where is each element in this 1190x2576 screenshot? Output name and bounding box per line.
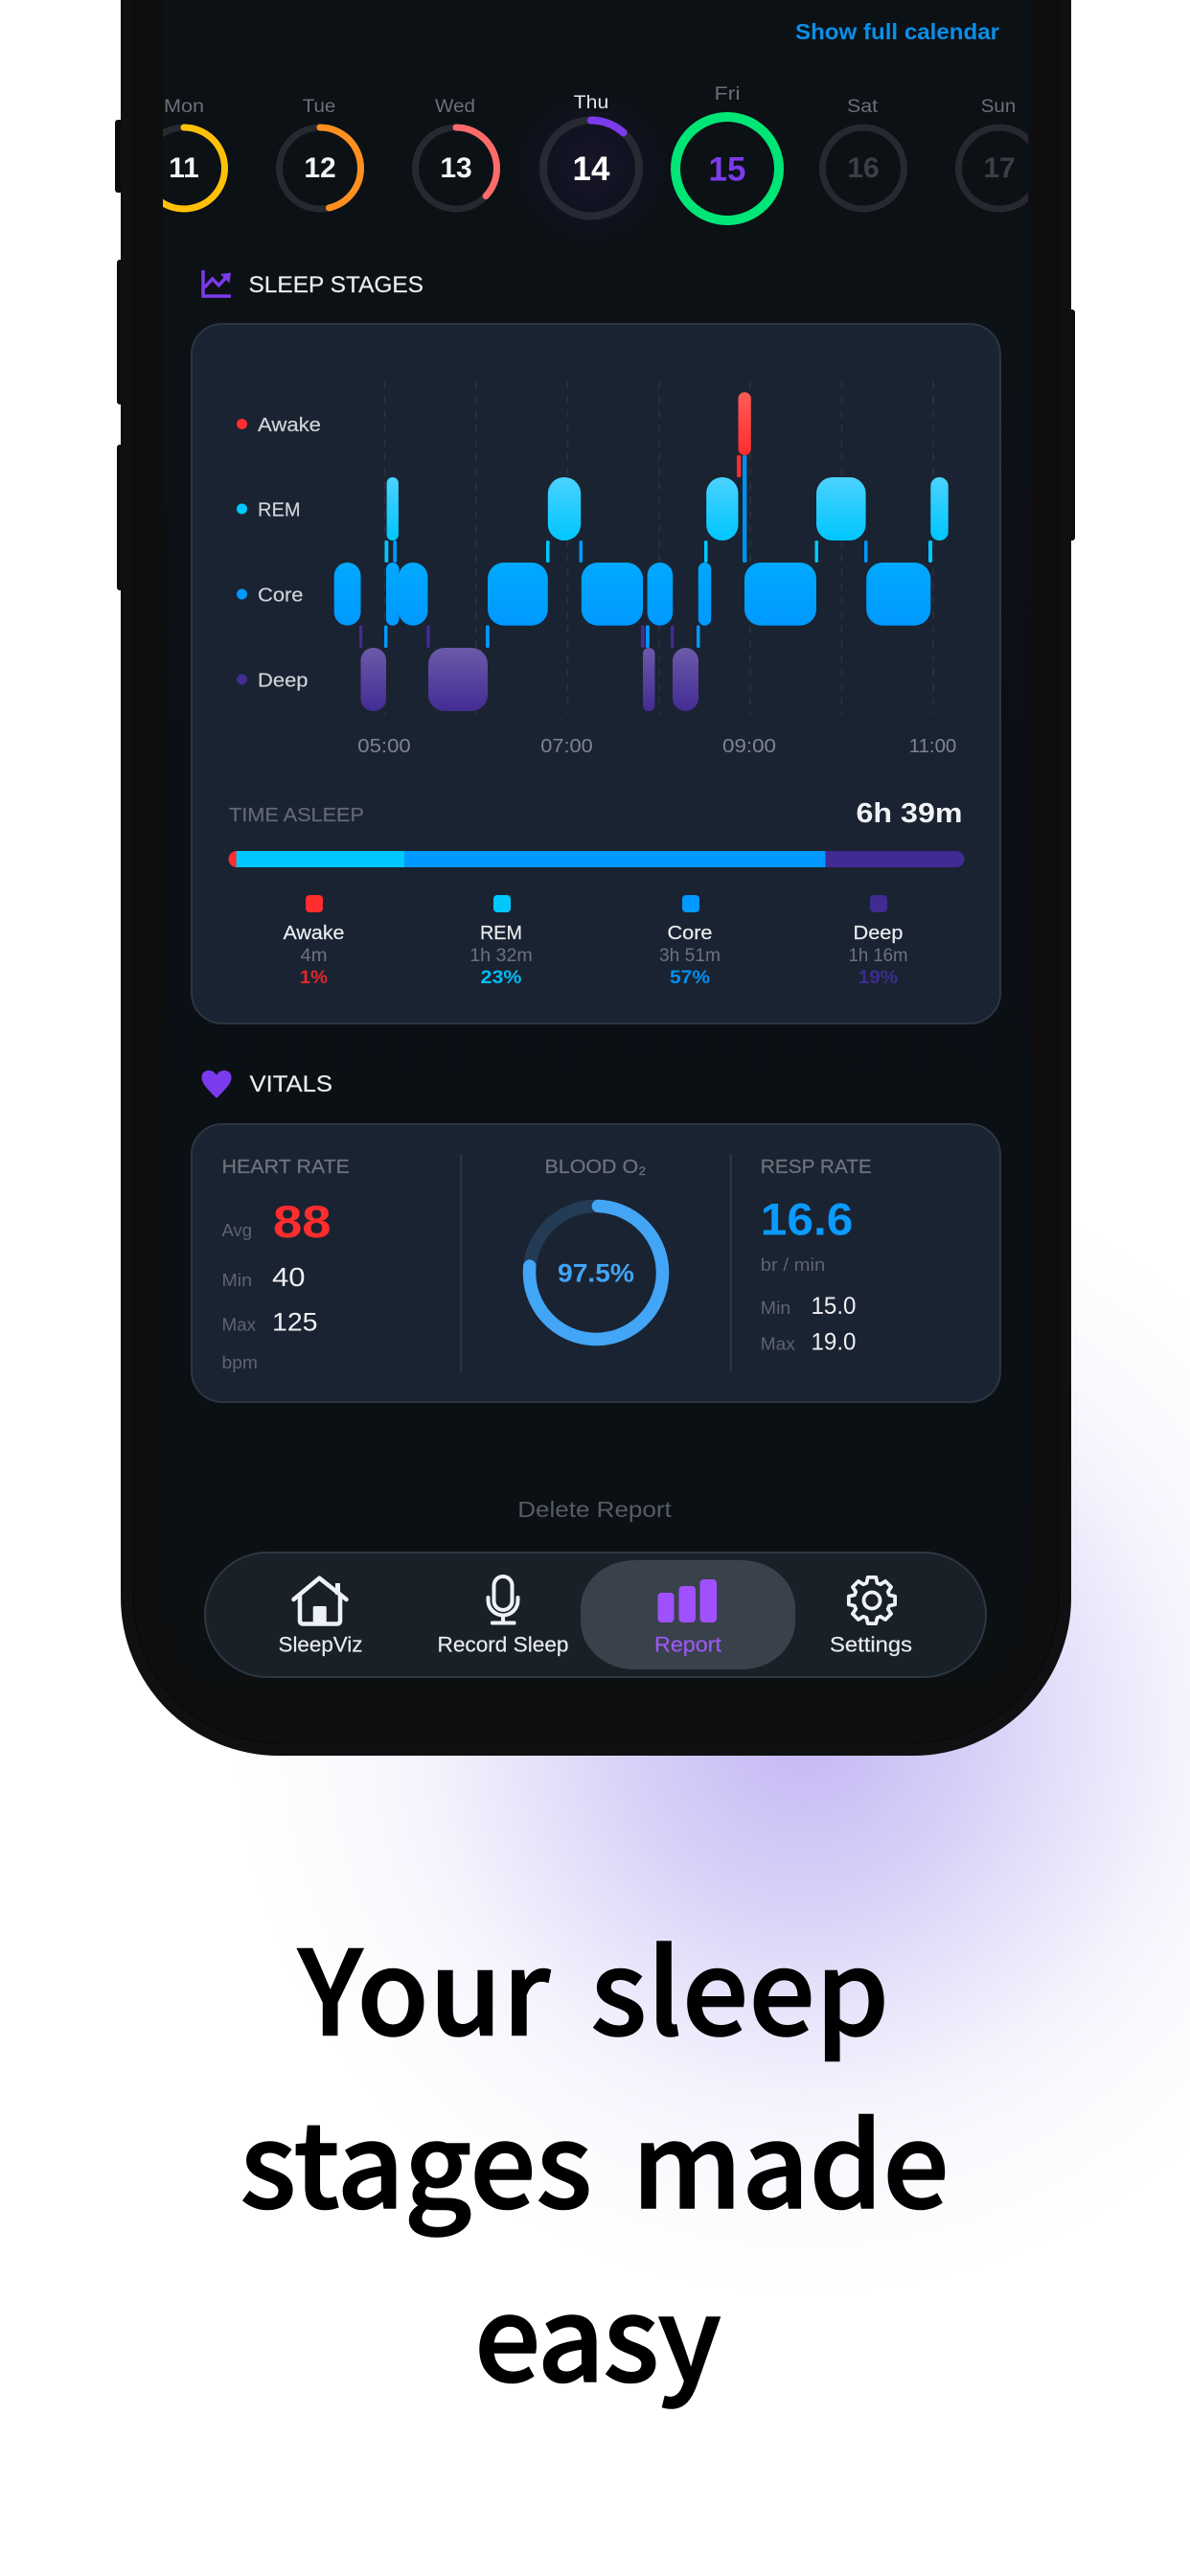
tab: Record Sleep — [437, 1576, 569, 1656]
day: Thu 14 — [543, 93, 639, 217]
donut gauge — [527, 1204, 665, 1342]
grid lines — [385, 381, 933, 714]
panel: sleep stages — [192, 324, 1000, 1024]
respiratory rate column: 19.0 — [811, 1328, 857, 1355]
day: Sun 17: Sun — [981, 97, 1016, 117]
legend: core — [659, 895, 721, 988]
day: Tue 12 — [280, 97, 360, 209]
legend: deep — [849, 895, 908, 988]
day: Thu 14: Thu — [574, 93, 608, 113]
stage labels: Awake — [258, 414, 321, 436]
heading: vitals: VITALS — [249, 1071, 332, 1097]
day: Wed 13: Wed — [435, 97, 475, 117]
time axis: 11:00 — [909, 735, 956, 757]
tab: SleepViz: SleepViz — [278, 1633, 362, 1656]
headline: Your sleep — [297, 1899, 889, 2070]
time axis: 05:00 — [357, 735, 411, 757]
respiratory rate column — [761, 1157, 872, 1355]
stage labels — [237, 414, 321, 692]
time axis: 07:00 — [540, 735, 593, 757]
day: Mon 11: Mon — [164, 97, 204, 117]
day: Thu 14: 14 — [573, 150, 610, 188]
heart rate column: Min — [222, 1270, 252, 1290]
day: Sat 16: Sat — [847, 97, 879, 117]
hypnogram connectors — [359, 455, 932, 648]
day: Sat 16: 16 — [847, 152, 880, 184]
phone mockup — [115, 0, 1075, 1756]
day: Fri 15: 15 — [709, 151, 745, 188]
legend: awake — [284, 895, 345, 988]
link: delete report: Delete Report — [517, 1497, 672, 1522]
hypnogram: deep blocks — [360, 648, 698, 711]
day: Wed 13: 13 — [440, 152, 472, 184]
legend: rem — [469, 895, 533, 988]
legend: rem: REM — [480, 922, 522, 944]
tab: Report (active): Report — [654, 1633, 721, 1656]
label: time asleep: TIME ASLEEP — [229, 805, 364, 826]
respiratory rate column: RESP RATE — [761, 1157, 872, 1178]
day: Tue 12: Tue — [303, 97, 335, 117]
respiratory rate column: 16.6 — [761, 1194, 853, 1244]
tab bar — [205, 1552, 986, 1677]
day: Fri 15: Fri — [715, 84, 740, 104]
stage labels: REM — [258, 498, 301, 521]
heart rate column: Avg — [222, 1220, 252, 1240]
tab: Settings — [830, 1577, 912, 1656]
icon: sleep stages chart — [203, 270, 231, 296]
panel: vitals — [192, 1124, 1000, 1402]
legend: deep: Deep — [853, 922, 903, 944]
day: Mon 11: 11 — [169, 152, 199, 184]
heart rate column: 125 — [272, 1307, 318, 1336]
highlight glow behind Thursday — [538, 114, 646, 222]
tab: Record Sleep: Record Sleep — [437, 1633, 569, 1656]
headline — [240, 1899, 949, 2416]
screen — [163, 0, 1030, 1718]
day: Sun 17 — [958, 97, 1041, 209]
heart rate column: Max — [222, 1315, 257, 1334]
heart rate column: 88 — [273, 1196, 332, 1247]
legend: rem: 1h 32m — [469, 946, 533, 966]
day: Mon 11 — [163, 100, 228, 213]
tab: Report (active) — [654, 1579, 721, 1656]
day: Sun 17: 17 — [983, 152, 1016, 184]
blood oxygen column: 97.5% — [558, 1259, 634, 1288]
day: Wed 13 — [416, 97, 496, 209]
active tab highlight — [581, 1560, 795, 1669]
legend: core: 57% — [670, 968, 710, 988]
legend: rem: 23% — [481, 968, 522, 988]
heart rate column: bpm — [222, 1352, 258, 1372]
time axis: 09:00 — [722, 735, 776, 757]
heart rate column — [222, 1157, 350, 1372]
blood oxygen column: BLOOD O₂ — [544, 1157, 646, 1178]
legend: awake: Awake — [284, 922, 345, 944]
stage labels: Deep — [258, 669, 309, 692]
link: show full calendar: Show full calendar — [795, 19, 999, 44]
tab: Settings: Settings — [830, 1633, 912, 1656]
respiratory rate column: 15.0 — [811, 1293, 857, 1320]
respiratory rate column: br / min — [761, 1254, 825, 1275]
heading: sleep stages: SLEEP STAGES — [249, 272, 423, 298]
blood oxygen column — [527, 1157, 665, 1342]
day: Fri 15 — [675, 84, 779, 220]
value: total sleep: 6h 39m — [857, 798, 962, 829]
hypnogram: core blocks — [334, 563, 930, 626]
time axis — [357, 735, 956, 757]
legend: core: 3h 51m — [659, 946, 721, 966]
stacked bar: stage share — [229, 851, 965, 867]
heart rate column: 40 — [272, 1262, 305, 1292]
headline: stages made — [240, 2073, 949, 2242]
day: Tue 12: 12 — [304, 152, 336, 184]
legend: awake: 1% — [300, 968, 328, 988]
hypnogram: awake block — [738, 392, 751, 455]
headline: easy — [474, 2246, 721, 2416]
legend: deep: 1h 16m — [849, 946, 908, 966]
side buttons — [115, 120, 1075, 590]
day: Sat 16 — [822, 97, 904, 209]
tab: SleepViz — [278, 1578, 362, 1656]
respiratory rate column: Min — [761, 1298, 790, 1318]
calendar strip — [163, 86, 1028, 225]
icon: heart — [201, 1070, 232, 1098]
heart rate column: HEART RATE — [222, 1157, 350, 1178]
respiratory rate column: Max — [761, 1334, 796, 1353]
stage labels: Core — [258, 585, 303, 606]
legend: deep: 19% — [858, 968, 898, 988]
legend: core: Core — [667, 922, 713, 944]
phone body — [121, 0, 1071, 1756]
legend: awake: 4m — [301, 946, 328, 966]
hypnogram: rem blocks — [387, 477, 949, 540]
